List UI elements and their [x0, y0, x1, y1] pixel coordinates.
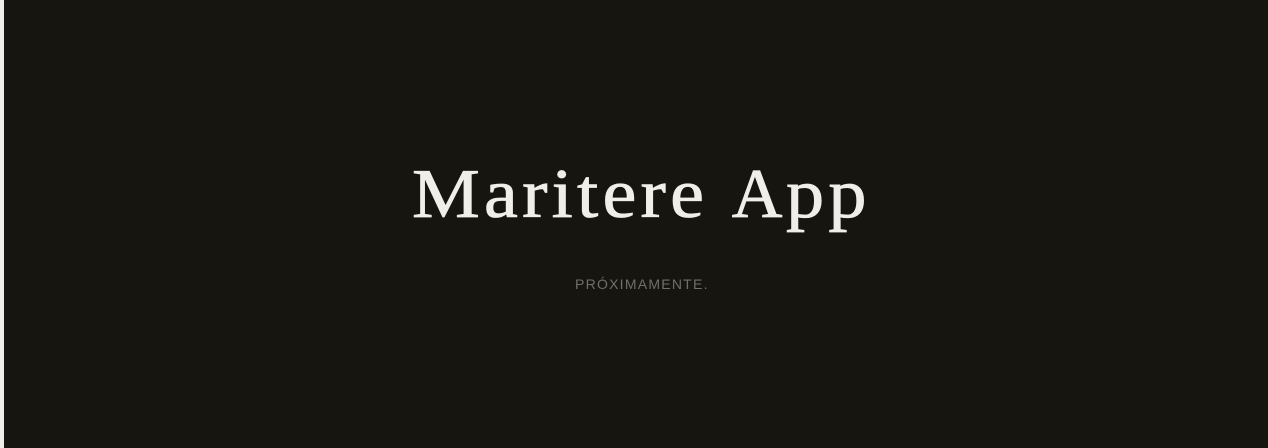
- title: A: [731, 156, 786, 233]
- title: Maritere pp: [412, 156, 871, 233]
- subtitle: PRÓXIMAMENTE.: [575, 276, 709, 292]
